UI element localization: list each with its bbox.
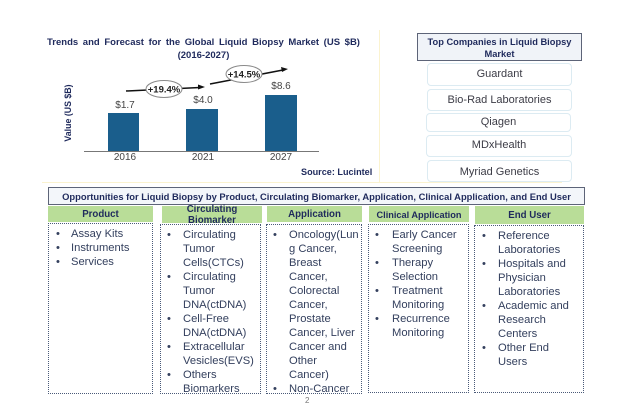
list: Clinical Application: Monitoring: [392, 327, 444, 339]
list: Circulating Biomarker: Tumor: [183, 243, 215, 255]
header: Circulating Biomarker: Circulating: [187, 204, 237, 215]
y axis label: Value (US $B): [63, 84, 73, 142]
company: Qiagen: Qiagen: [481, 116, 516, 128]
list: Circulating Biomarker: DNA(ctDNA): [183, 299, 246, 311]
list: Product: Instruments: [71, 242, 129, 254]
list: Application: [266, 224, 362, 394]
panel: End User: [474, 206, 584, 393]
list: Application: Colorectal: [289, 285, 339, 297]
list: End User: •: [482, 342, 486, 354]
company: Myriad Genetics: Myriad Genetics: [460, 166, 539, 178]
list: Circulating Biomarker: •: [167, 341, 171, 353]
list: Application: Cancer,: [289, 299, 328, 311]
list: End User: [474, 225, 584, 393]
callout: +14.5%: [226, 66, 262, 82]
list: Circulating Biomarker: •: [167, 271, 171, 283]
list: Application: Cancer,: [289, 271, 328, 283]
list: Clinical Application: Screening: [392, 243, 442, 255]
company: Bio-Rad Laboratories: [427, 89, 572, 111]
growth arrows: [126, 65, 288, 98]
list: End User: •: [482, 300, 486, 312]
list: Clinical Application: Treatment: [392, 285, 443, 297]
list: End User: Laboratories: [498, 244, 560, 256]
list: End User: Reference: [498, 230, 550, 242]
companies heading: [417, 33, 582, 61]
list: Clinical Application: Therapy: [392, 257, 433, 269]
value 2027: $8.6: [271, 81, 291, 92]
list: Application: Other: [289, 355, 317, 367]
panel: Application: [266, 206, 362, 394]
list: Application: Cancer): [289, 369, 329, 381]
company: Bio-Rad Laboratories: Bio-Rad Laboratories: [448, 94, 551, 106]
list: Circulating Biomarker: [160, 224, 261, 394]
header: End User: [475, 206, 584, 224]
list: Product: •: [56, 256, 60, 268]
header: Clinical Application: Clinical Application: [377, 210, 461, 220]
company: Myriad Genetics: [427, 160, 572, 182]
header: Application: [267, 206, 362, 222]
header: End User: End User: [508, 210, 551, 221]
list: Circulating Biomarker: •: [167, 369, 171, 381]
list: Circulating Biomarker: Tumor: [183, 285, 215, 297]
list: End User: •: [482, 230, 486, 242]
list: Clinical Application: •: [375, 285, 379, 297]
header: Circulating Biomarker: Biomarker: [188, 215, 236, 226]
value 2016: $1.7: [115, 100, 135, 111]
company: Guardant: Guardant: [477, 68, 522, 80]
list: Application: g Cancer,: [289, 243, 337, 255]
chart title: [47, 37, 360, 60]
company: Qiagen: [426, 113, 571, 132]
company: Guardant: [427, 63, 572, 86]
list: Product: Assay Kits: [71, 228, 123, 240]
opportunities heading: [48, 187, 585, 205]
list: Application: Breast: [289, 257, 321, 269]
list: Product: •: [56, 228, 60, 240]
list: Application: Oncology(Lun: [289, 229, 359, 241]
list: Circulating Biomarker: Cells(CTCs): [183, 257, 244, 269]
list: Product: •: [56, 242, 60, 254]
list: Circulating Biomarker: Circulating: [183, 229, 236, 241]
companies heading: Top Companies in Liquid Biopsy: [428, 37, 571, 47]
year 2027: 2027: [270, 152, 292, 163]
list: Circulating Biomarker: Circulating: [183, 271, 236, 283]
list: End User: Hospitals and: [498, 258, 566, 270]
list: Application: •: [273, 229, 277, 241]
divider: vertical: [379, 30, 380, 183]
list: End User: Academic and: [498, 300, 569, 312]
header: Application: Application: [288, 209, 341, 220]
header: Clinical Application: [369, 206, 469, 222]
company: MDxHealth: [426, 135, 572, 157]
list: Circulating Biomarker: •: [167, 229, 171, 241]
list: Clinical Application: •: [375, 229, 379, 241]
list: End User: Research: [498, 314, 546, 326]
panel: Circulating Biomarker: [160, 204, 262, 394]
bar 2027: [265, 95, 297, 151]
list: End User: •: [482, 258, 486, 270]
list: Application: Cancer, Liver: [289, 327, 355, 339]
bar 2021: [186, 109, 218, 151]
x axis: [84, 151, 319, 152]
list: Circulating Biomarker: Cell-Free: [183, 313, 229, 325]
header: Product: Product: [82, 209, 119, 220]
company: MDxHealth: MDxHealth: [472, 139, 526, 151]
year 2021: 2021: [192, 152, 214, 163]
list: Clinical Application: Early Cancer: [392, 229, 457, 241]
list: Clinical Application: Monitoring: [392, 299, 444, 311]
header: Product: [48, 206, 153, 222]
list: End User: Centers: [498, 328, 537, 340]
list: Product: [48, 223, 153, 394]
list: Circulating Biomarker: •: [167, 313, 171, 325]
divider: horizontal: [42, 182, 562, 183]
opportunities heading: Opportunities for Liquid Biopsy by Product, Circulating Biomarker, Application, Clinical Application, and End User: [62, 191, 571, 202]
year 2016: 2016: [114, 152, 136, 163]
panel: Product: [48, 206, 153, 394]
page number: 2: [305, 396, 309, 405]
list: Clinical Application: Selection: [392, 271, 438, 283]
list: End User: Physician: [498, 272, 546, 284]
header: Circulating Biomarker: [162, 206, 262, 223]
chart title: (2016-2027): [178, 50, 229, 60]
callout: +19.4%: +19.4%: [148, 84, 181, 96]
bar chart: [63, 81, 319, 163]
list: Circulating Biomarker: Others: [183, 369, 217, 381]
list: Circulating Biomarker: Vesicles(EVS): [183, 355, 254, 367]
list: Application: Prostate: [289, 313, 331, 325]
list: Clinical Application: •: [375, 257, 379, 269]
list: Circulating Biomarker: DNA(ctDNA): [183, 327, 246, 339]
companies heading: Market: [484, 49, 514, 59]
panel: top companies: [417, 33, 582, 182]
list: Application: Cancer and: [289, 341, 347, 353]
list: End User: Laboratories: [498, 286, 560, 298]
arrow: 2016 to 2021: [126, 84, 205, 91]
list: Circulating Biomarker: Extracellular: [183, 341, 245, 353]
list: Clinical Application: Recurrence: [392, 313, 450, 325]
list: End User: Other End: [498, 342, 549, 354]
list: Clinical Application: •: [375, 313, 379, 325]
panel: Clinical Application: [368, 206, 469, 393]
list: Clinical Application: [368, 224, 469, 393]
value 2021: $4.0: [193, 95, 213, 106]
list: End User: Users: [498, 356, 527, 368]
callout: +19.4%: [146, 80, 182, 98]
callout: +14.5%: +14.5%: [228, 70, 261, 80]
chart title: Trends and Forecast for the Global Liquid Biopsy Market (US $B): [47, 37, 360, 48]
list: Product: Services: [71, 256, 114, 268]
bar 2016: [108, 113, 139, 151]
source note: Source: Lucintel: [301, 167, 372, 177]
arrow: 2021 to 2027: [210, 67, 288, 84]
